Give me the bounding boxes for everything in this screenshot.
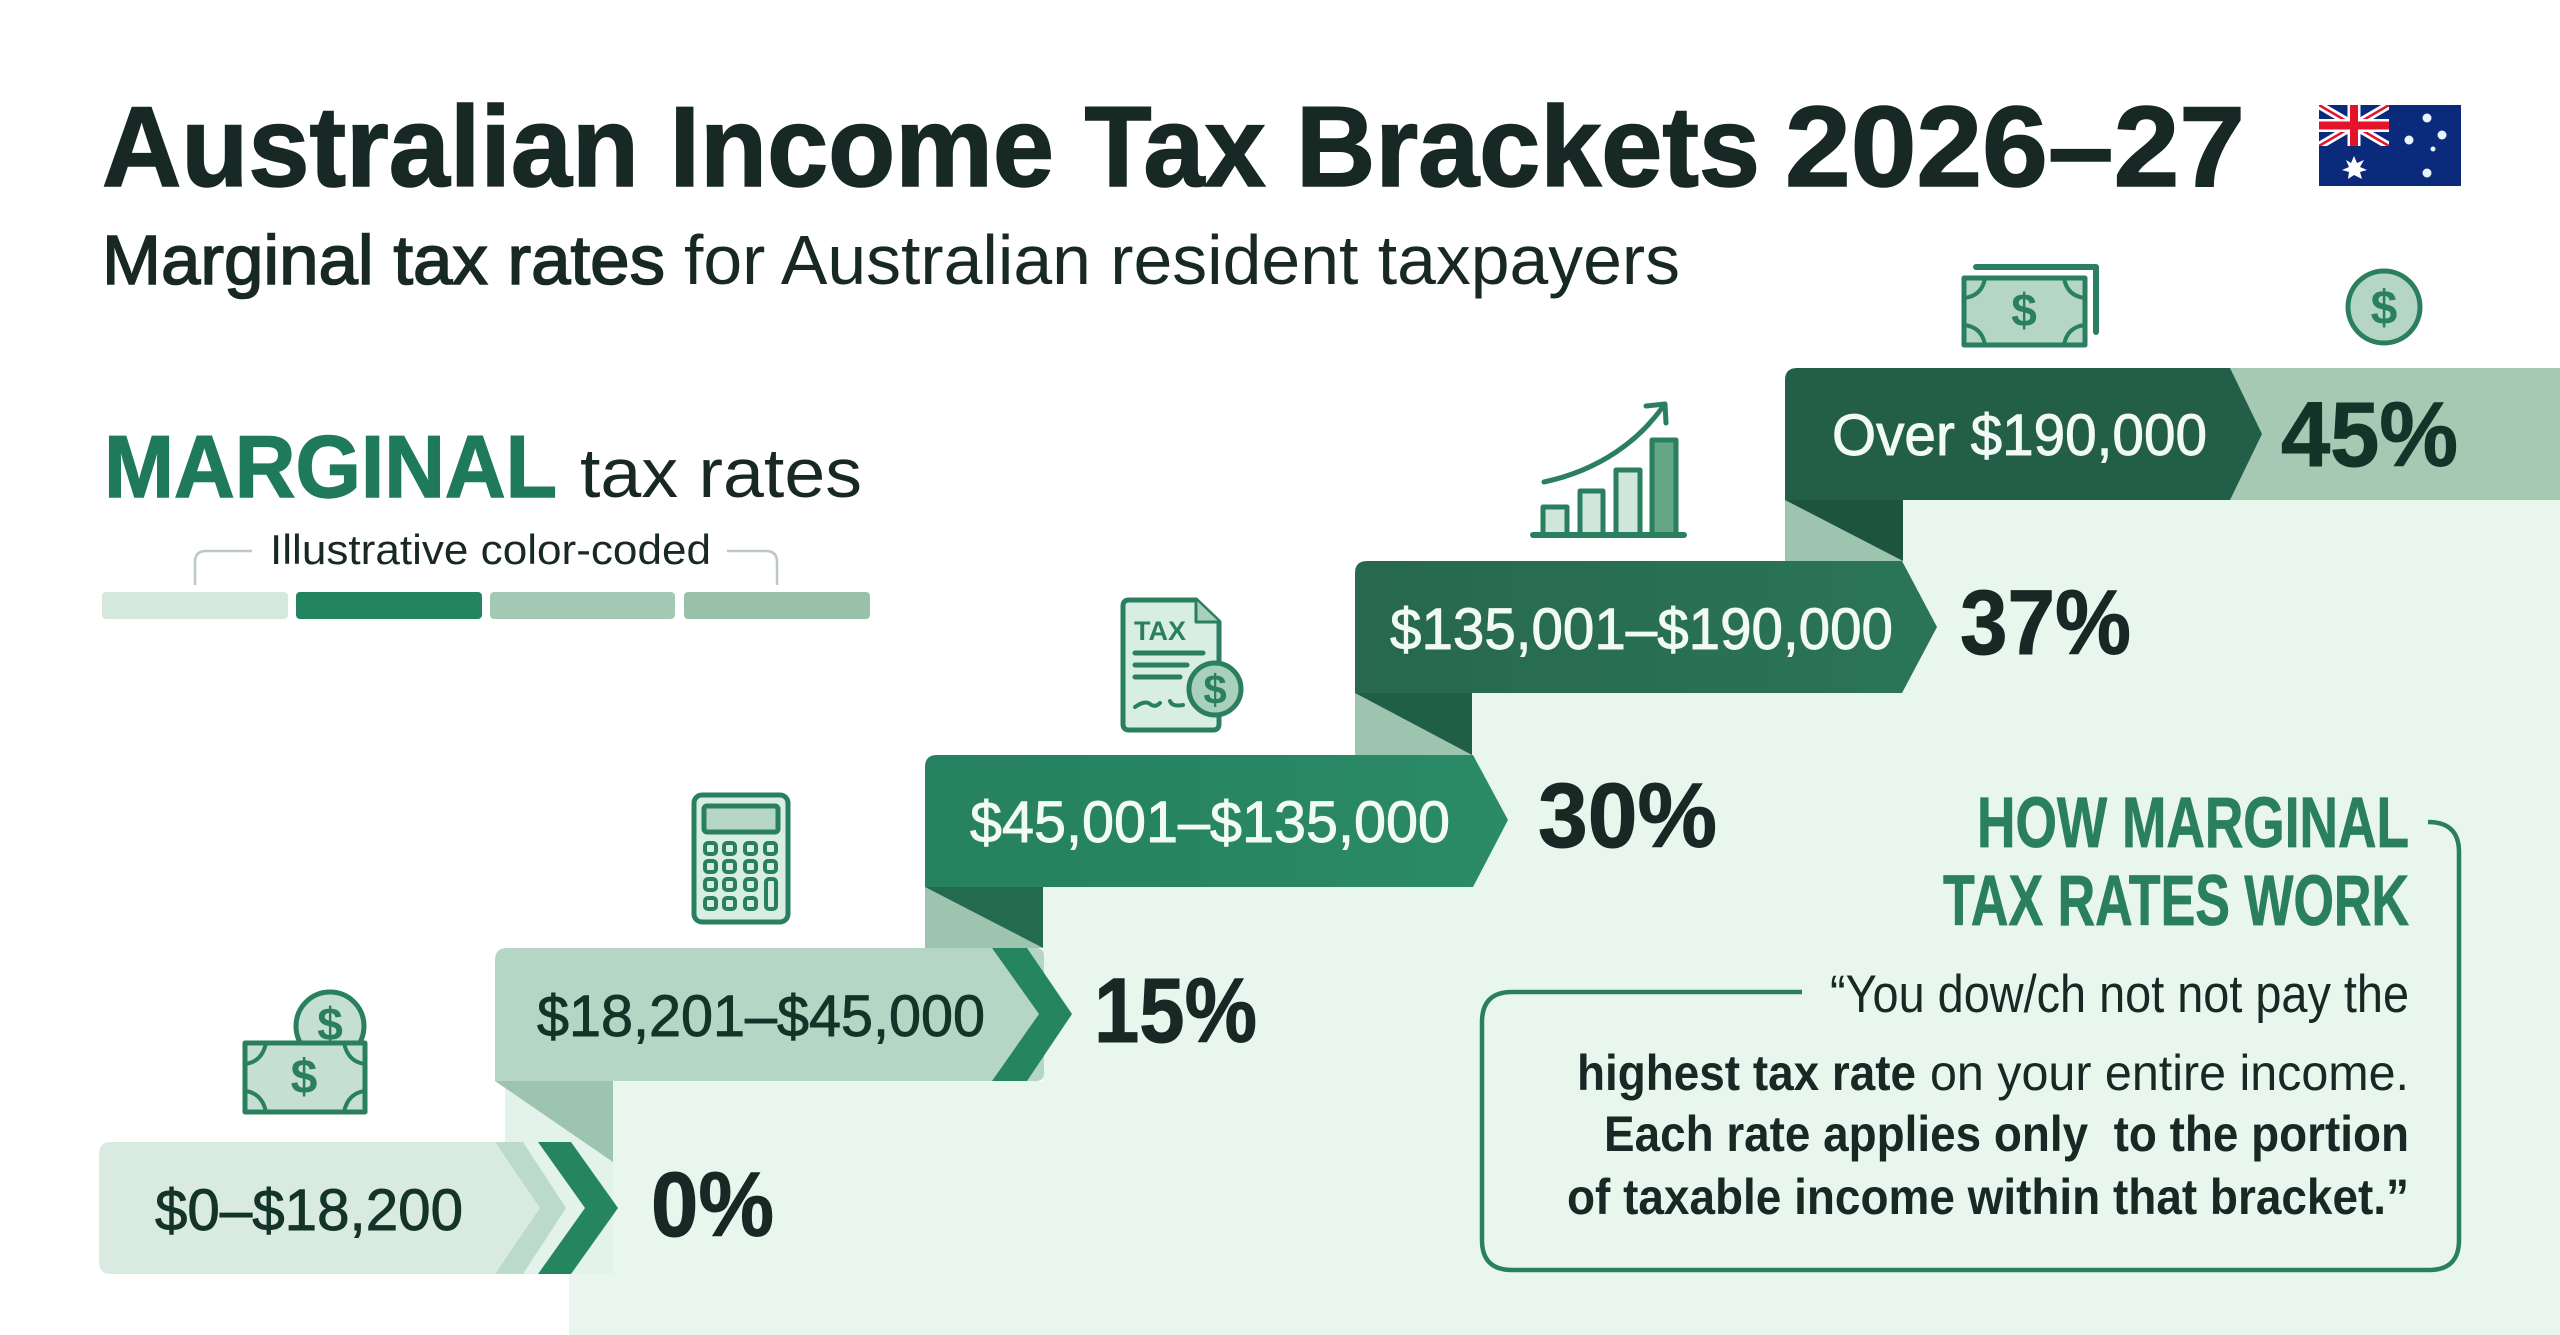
- band: 37% bracket: $135,001–$190,000: [1390, 597, 1893, 662]
- icon: banknote and coin: $: [317, 998, 343, 1050]
- band: 45% bracket: [1785, 368, 2560, 500]
- legend: illustrative colour coding: Illustrative color-coded: [270, 526, 711, 573]
- callout: how marginal tax rates work: [1482, 784, 2459, 1270]
- icon: tax document: TAX: [1134, 616, 1186, 646]
- band: 30% bracket: [925, 755, 1717, 887]
- band: 15% bracket: [495, 948, 1257, 1081]
- callout heading: HOW MARGINAL: [1977, 784, 2409, 863]
- subtitle: [102, 221, 1680, 299]
- band: 45% bracket: Over $190,000: [1832, 403, 2207, 468]
- band: 0% bracket: $0–$18,200: [155, 1178, 463, 1243]
- subtitle: Marginal tax rates: [102, 221, 665, 299]
- background: pale green staircase area: [569, 500, 2560, 1335]
- callout body text: [1567, 965, 2409, 1225]
- fold: under 37% bracket: [1355, 693, 1472, 755]
- callout outline: [1482, 822, 2459, 1270]
- band: 45% bracket: 45%: [2281, 384, 2458, 486]
- icon: growth chart: [1533, 404, 1684, 535]
- band: 37% bracket: 37%: [1960, 572, 2131, 674]
- fold: under top bracket: [1785, 500, 1903, 561]
- subtitle: for Australian resident taxpayers: [684, 221, 1680, 299]
- icon: banknote stack: $: [2011, 284, 2037, 336]
- band: 37% bracket: [1355, 561, 2131, 693]
- fold: under 15% bracket: [495, 1081, 613, 1274]
- icon: tax document: [1123, 600, 1241, 730]
- legend: illustrative colour coding: [102, 526, 870, 619]
- fold: under 30% bracket: [925, 887, 1043, 948]
- heading: MARGINAL tax rates: MARGINAL: [104, 417, 557, 516]
- band: 15% bracket: 15%: [1094, 960, 1257, 1062]
- title: Australian Income Tax Brackets: [102, 84, 1760, 211]
- band: 0% bracket: 0%: [651, 1154, 774, 1256]
- band: 30% bracket: 30%: [1538, 765, 1717, 867]
- heading: MARGINAL tax rates: [104, 417, 862, 516]
- callout body text: “You dow/ch not not pay the: [1830, 965, 2409, 1024]
- band: 15% bracket: $18,201–$45,000: [537, 984, 985, 1049]
- callout body text: of taxable income within that bracket.”: [1567, 1169, 2409, 1225]
- callout body text: highest tax rate: [1577, 1045, 1916, 1101]
- callout body text: Each rate applies only to the portion: [1604, 1106, 2409, 1162]
- icon: dollar coin: $: [2371, 282, 2398, 335]
- icon: banknote and coin: $: [291, 1051, 318, 1104]
- icon: dollar coin: [2348, 271, 2420, 343]
- heading: MARGINAL tax rates: tax rates: [580, 434, 862, 512]
- icon: banknote stack: [1964, 267, 2096, 345]
- icon: banknote and coin: [245, 992, 365, 1112]
- icon: calculator: [694, 795, 788, 922]
- callout heading: [1943, 784, 2409, 941]
- band: 0% bracket: [99, 1142, 774, 1274]
- title: 2026–27: [1785, 84, 2245, 211]
- icon: tax document: $: [1203, 666, 1227, 713]
- band: 30% bracket: $45,001–$135,000: [970, 790, 1450, 855]
- icon: Australian flag: [2319, 105, 2461, 186]
- callout body text: on your entire income.: [1930, 1045, 2409, 1101]
